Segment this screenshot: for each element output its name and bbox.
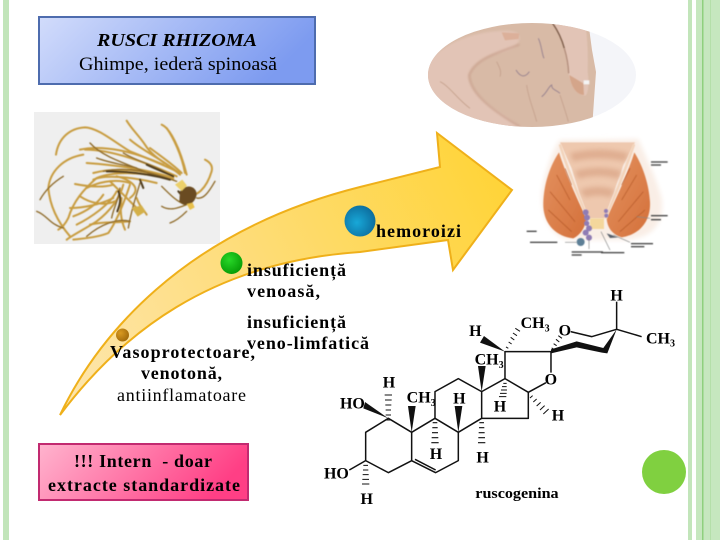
- chemical structure: ruscogenina: H: [610, 288, 623, 305]
- chemical structure: ruscogenina: CH: [407, 390, 431, 407]
- decorative green circle: [642, 450, 686, 494]
- label: insuficiență veno-limfatică: insuficiență: [247, 312, 346, 333]
- chemical structure: ruscogenina: O: [559, 323, 571, 340]
- chemical structure: ruscogenina: H: [494, 399, 507, 416]
- label: vasoprotectoare, venotonă, antiinflamatoare: Vasoprotectoare,: [110, 342, 255, 362]
- title box: Rusci rhizoma: [39, 17, 315, 84]
- bullet: orange dot: [116, 328, 129, 342]
- chemical structure: ruscogenina: O: [545, 372, 557, 389]
- chemical structure: ruscogenina: CH: [475, 352, 499, 369]
- chemical structure: ruscogenina: H: [453, 390, 466, 407]
- label: insuficiență veno-limfatică: [247, 312, 369, 353]
- label: insuficiență venoasă: [247, 260, 346, 301]
- photo: leg with varicose veins: [428, 23, 636, 127]
- bullet: blue dot: [344, 206, 376, 236]
- chemical structure: ruscogenina: CH: [646, 330, 671, 347]
- caption: ruscogenina: ruscogenina: [475, 486, 559, 502]
- label: vasoprotectoare, venotonă, antiinflamatoare: antiinflamatoare: [117, 385, 246, 405]
- bullet: green dot: [220, 252, 242, 274]
- chemical structure: ruscogenina: H: [469, 323, 482, 340]
- title box: Rusci rhizoma: RUSCI RHIZOMA: [96, 30, 257, 50]
- right border stripes: [688, 0, 720, 540]
- chemical structure: ruscogenina: H: [552, 408, 565, 425]
- chemical structure: ruscogenina: 3: [499, 360, 504, 371]
- label: vasoprotectoare, venotonă, antiinflamatoare: [110, 342, 255, 405]
- chemical structure: ruscogenina: HO: [324, 465, 349, 482]
- chemical structure: ruscogenina: CH: [521, 315, 545, 332]
- callout: intern warning: extracte standardizate: [48, 475, 240, 495]
- chemical structure: ruscogenina: 3: [670, 339, 675, 350]
- label: vasoprotectoare, venotonă, antiinflamatoare: venotonă,: [141, 363, 222, 383]
- callout: intern warning: !!! Intern - doar: [74, 451, 212, 471]
- chemical structure: ruscogenina: H: [360, 491, 373, 508]
- callout: intern warning: [39, 444, 248, 500]
- illustration: hemorrhoids anatomy: [527, 139, 668, 256]
- label: insuficiență veno-limfatică: veno-limfatică: [247, 333, 369, 353]
- chemical structure: ruscogenina: H: [476, 449, 489, 466]
- chemical structure: ruscogenina: HO: [340, 396, 365, 413]
- chemical structure: ruscogenina: H: [383, 374, 396, 391]
- title box: Rusci rhizoma: Ghimpe, iederă spinoasă: [79, 54, 278, 75]
- chemical structure: ruscogenina: H: [430, 446, 443, 463]
- chemical structure: ruscogenina: [324, 288, 675, 508]
- label: insuficiență venoasă: venoasă,: [247, 281, 320, 301]
- label: hemoroizi: hemoroizi: [376, 221, 461, 241]
- left border stripe: [3, 0, 9, 540]
- chemical structure: ruscogenina: 3: [431, 398, 436, 409]
- photo: dried rhizome roots: [34, 112, 220, 244]
- label: insuficiență venoasă: insuficiență: [247, 260, 346, 281]
- curved yellow arrow: [60, 133, 512, 415]
- chemical structure: ruscogenina: 3: [545, 323, 550, 334]
